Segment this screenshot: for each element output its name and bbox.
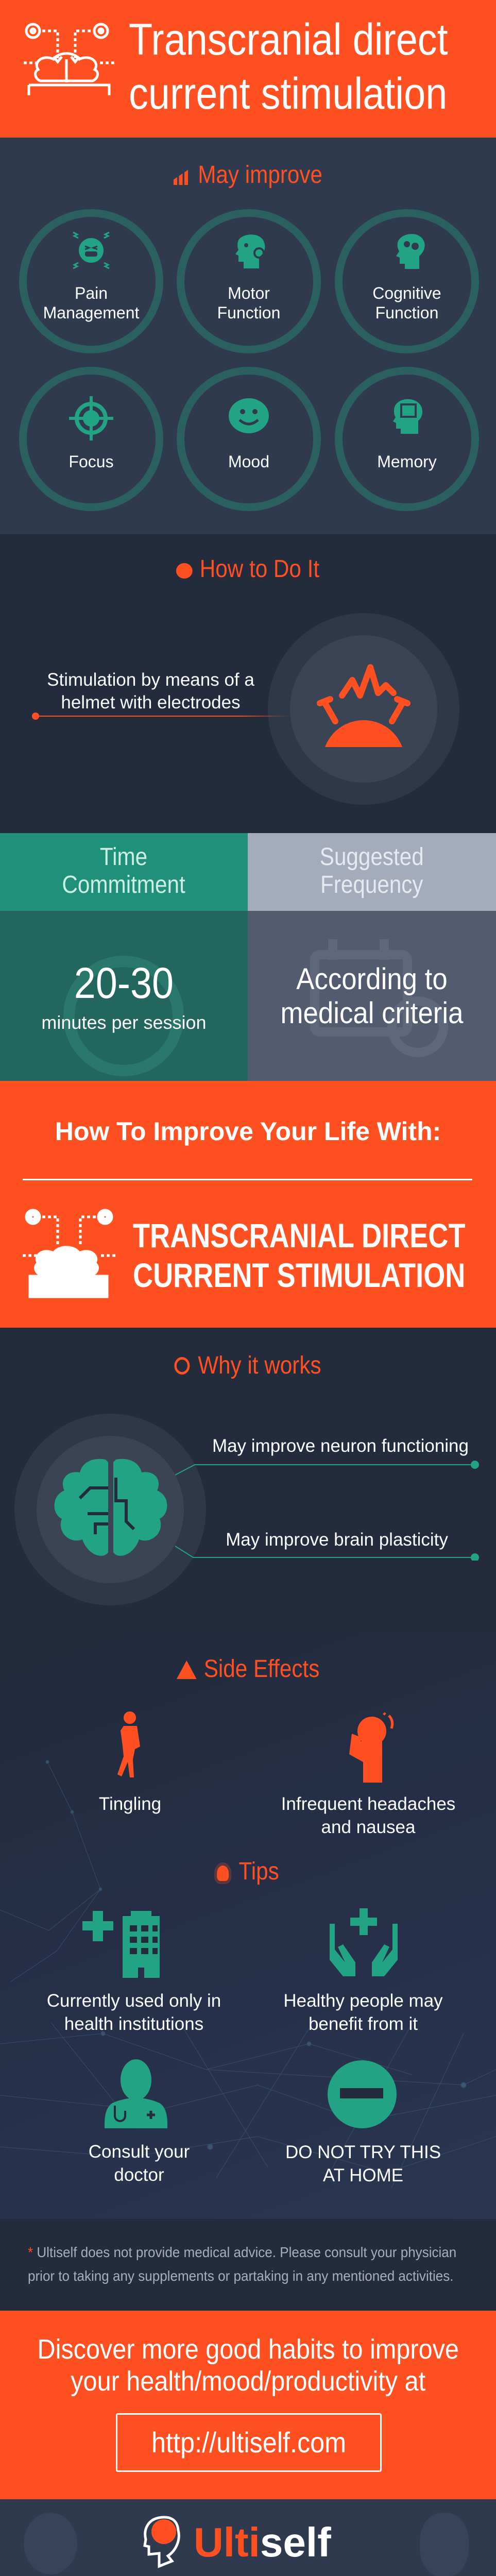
heading: why it works: Why it works bbox=[198, 1352, 321, 1379]
label: doctor bbox=[114, 2165, 164, 2185]
panel: how to do it bbox=[0, 534, 496, 833]
header: time commitment bbox=[0, 833, 248, 911]
label: Management bbox=[43, 303, 139, 322]
faint background icons bbox=[24, 2513, 77, 2574]
caption: minutes per session bbox=[41, 1012, 207, 1033]
icon: hospital bbox=[82, 1911, 160, 1978]
icon: brain head bbox=[143, 2514, 189, 2570]
icon: tingling person bbox=[117, 1711, 140, 1777]
heading: tips: Tips bbox=[239, 1858, 279, 1885]
call to action bbox=[0, 2311, 496, 2499]
tip: healthy people bbox=[283, 1908, 443, 2034]
url button bbox=[116, 2413, 382, 2472]
label: headaches and nausea: and nausea bbox=[321, 1817, 415, 1837]
heading: how to do it: How to Do It bbox=[200, 555, 320, 583]
label bbox=[47, 1991, 221, 2034]
label: Motor bbox=[228, 284, 270, 302]
label: AT HOME bbox=[323, 2165, 403, 2185]
heading: may improve: May improve bbox=[198, 161, 322, 189]
panel: how to improve banner bbox=[0, 1081, 496, 1328]
icon: head with memory card bbox=[393, 399, 422, 434]
text: neuron functioning: May improve neuron functioning bbox=[212, 1436, 469, 1456]
title: TRANSCRANIAL DIRECT CURRENT STIMULATION: TRANSCRANIAL DIRECT bbox=[133, 1216, 465, 1255]
cta text bbox=[0, 2333, 496, 2397]
label: Function bbox=[217, 303, 280, 322]
icon: headache person bbox=[349, 1712, 394, 1783]
disclaimer: * Ultiself does not provide medical advice. Please consult your physician bbox=[28, 2244, 456, 2260]
heading: how to improve: How To Improve Your Life With: bbox=[55, 1117, 441, 1146]
icon: faint calendar bbox=[310, 939, 448, 1057]
tip: do not try at home bbox=[268, 2060, 458, 2189]
brain circle bbox=[14, 1414, 206, 1605]
label: Mood bbox=[228, 452, 269, 471]
icon: target bbox=[69, 396, 113, 440]
icon: doctor bbox=[105, 2059, 167, 2128]
tip: consult doctor bbox=[67, 2059, 211, 2188]
circle: mood bbox=[177, 367, 321, 511]
heading: tips bbox=[214, 1858, 279, 1885]
tip: health institutions bbox=[47, 1911, 221, 2034]
label: Currently used only in bbox=[47, 1991, 221, 2011]
circle: focus bbox=[19, 367, 163, 511]
label bbox=[268, 2141, 458, 2187]
label: Consult your bbox=[89, 2142, 190, 2162]
text: stimulation by helmet: Stimulation by means of a bbox=[47, 670, 254, 690]
circle: pain management bbox=[19, 209, 163, 353]
title: TRANSCRANIAL DIRECT CURRENT STIMULATION bbox=[133, 1216, 465, 1294]
icon: faint clock bbox=[63, 956, 184, 1076]
icon: head with gears bbox=[235, 234, 265, 268]
header: time commitment: Commitment bbox=[62, 871, 185, 899]
value: according to medical criteria bbox=[281, 962, 464, 1030]
label: Focus bbox=[69, 452, 114, 471]
icon: hands with cross bbox=[330, 1908, 398, 1976]
icon: pain face bbox=[72, 232, 110, 269]
wordmark: Ultiself bbox=[194, 2519, 331, 2565]
label bbox=[67, 2140, 211, 2187]
title: Transcranial direct bbox=[129, 15, 448, 64]
label bbox=[43, 284, 139, 322]
header banner bbox=[0, 0, 496, 138]
label: DO NOT TRY THIS bbox=[285, 2142, 441, 2162]
panel: why it works bbox=[0, 1328, 496, 1632]
label bbox=[283, 1991, 443, 2034]
title: current stimulation bbox=[129, 69, 447, 118]
heading: side effects: Side Effects bbox=[204, 1655, 319, 1683]
panel: suggested frequency bbox=[248, 833, 496, 1081]
logo: Ultiself bbox=[143, 2514, 360, 2570]
value: 20-30: 20-30 bbox=[74, 959, 174, 1007]
panel: time commitment bbox=[0, 833, 248, 1081]
disclaimer bbox=[0, 2219, 496, 2311]
circle: cognitive function bbox=[335, 209, 479, 353]
header: suggested frequency bbox=[248, 833, 496, 911]
circle: memory bbox=[335, 367, 479, 511]
icon: no-entry sign bbox=[327, 2060, 397, 2129]
label: tingling: Tingling bbox=[99, 1794, 161, 1814]
connector: plasticity bbox=[175, 1546, 479, 1561]
header: time commitment: Time bbox=[100, 843, 148, 871]
cta text: Discover more good habits to improve bbox=[37, 2334, 459, 2365]
text: stimulation by helmet: helmet with electrodes bbox=[61, 692, 241, 713]
disclaimer: prior to taking any supplements or partaking in any mentioned activities. bbox=[28, 2268, 453, 2284]
label: benefit from it bbox=[309, 2014, 418, 2034]
icon: helmet with electrodes bbox=[317, 664, 411, 747]
title: TRANSCRANIAL DIRECT CURRENT STIMULATION: CURRENT STIMULATION bbox=[133, 1256, 465, 1294]
label: Function bbox=[375, 303, 438, 322]
label: headaches and nausea: Infrequent headaches bbox=[281, 1794, 455, 1814]
header: suggested frequency: Suggested bbox=[320, 843, 424, 871]
icon: smiley bbox=[229, 398, 269, 433]
value: according to medical criteria: According to bbox=[296, 962, 448, 996]
label: Healthy people may bbox=[283, 1991, 443, 2011]
text: stimulation by helmet bbox=[47, 670, 254, 713]
side effect: headaches bbox=[281, 1712, 455, 1837]
url button: http://ultiself.com bbox=[151, 2426, 346, 2459]
text: brain plasticity: May improve brain plasticity bbox=[226, 1530, 448, 1550]
panel: side effects and tips bbox=[0, 1632, 496, 2219]
label bbox=[217, 284, 280, 322]
side effect: tingling bbox=[99, 1711, 161, 1814]
title bbox=[129, 15, 448, 118]
network background bbox=[0, 1760, 496, 2188]
connector: neuron bbox=[175, 1461, 479, 1476]
value: according to medical criteria: medical criteria bbox=[281, 996, 463, 1030]
footer bbox=[0, 2499, 496, 2576]
label: Cognitive bbox=[372, 284, 441, 302]
label: Memory bbox=[377, 452, 437, 471]
label bbox=[372, 284, 441, 322]
cta text: your health/mood/productivity at bbox=[71, 2366, 425, 2397]
connector line bbox=[32, 713, 287, 720]
label: health institutions bbox=[64, 2014, 203, 2034]
icon: brain logo bbox=[23, 1209, 115, 1298]
icon: circuit brain bbox=[55, 1459, 167, 1556]
header: suggested frequency: Frequency bbox=[320, 871, 423, 899]
panel: may improve bbox=[0, 138, 496, 534]
label: headaches and nausea bbox=[281, 1794, 455, 1837]
icon: head with cogs bbox=[396, 234, 425, 269]
circle: motor function bbox=[177, 209, 321, 353]
helmet circle bbox=[268, 613, 459, 805]
icon: brain stimulation logo bbox=[24, 23, 114, 95]
label: Pain bbox=[75, 284, 108, 302]
